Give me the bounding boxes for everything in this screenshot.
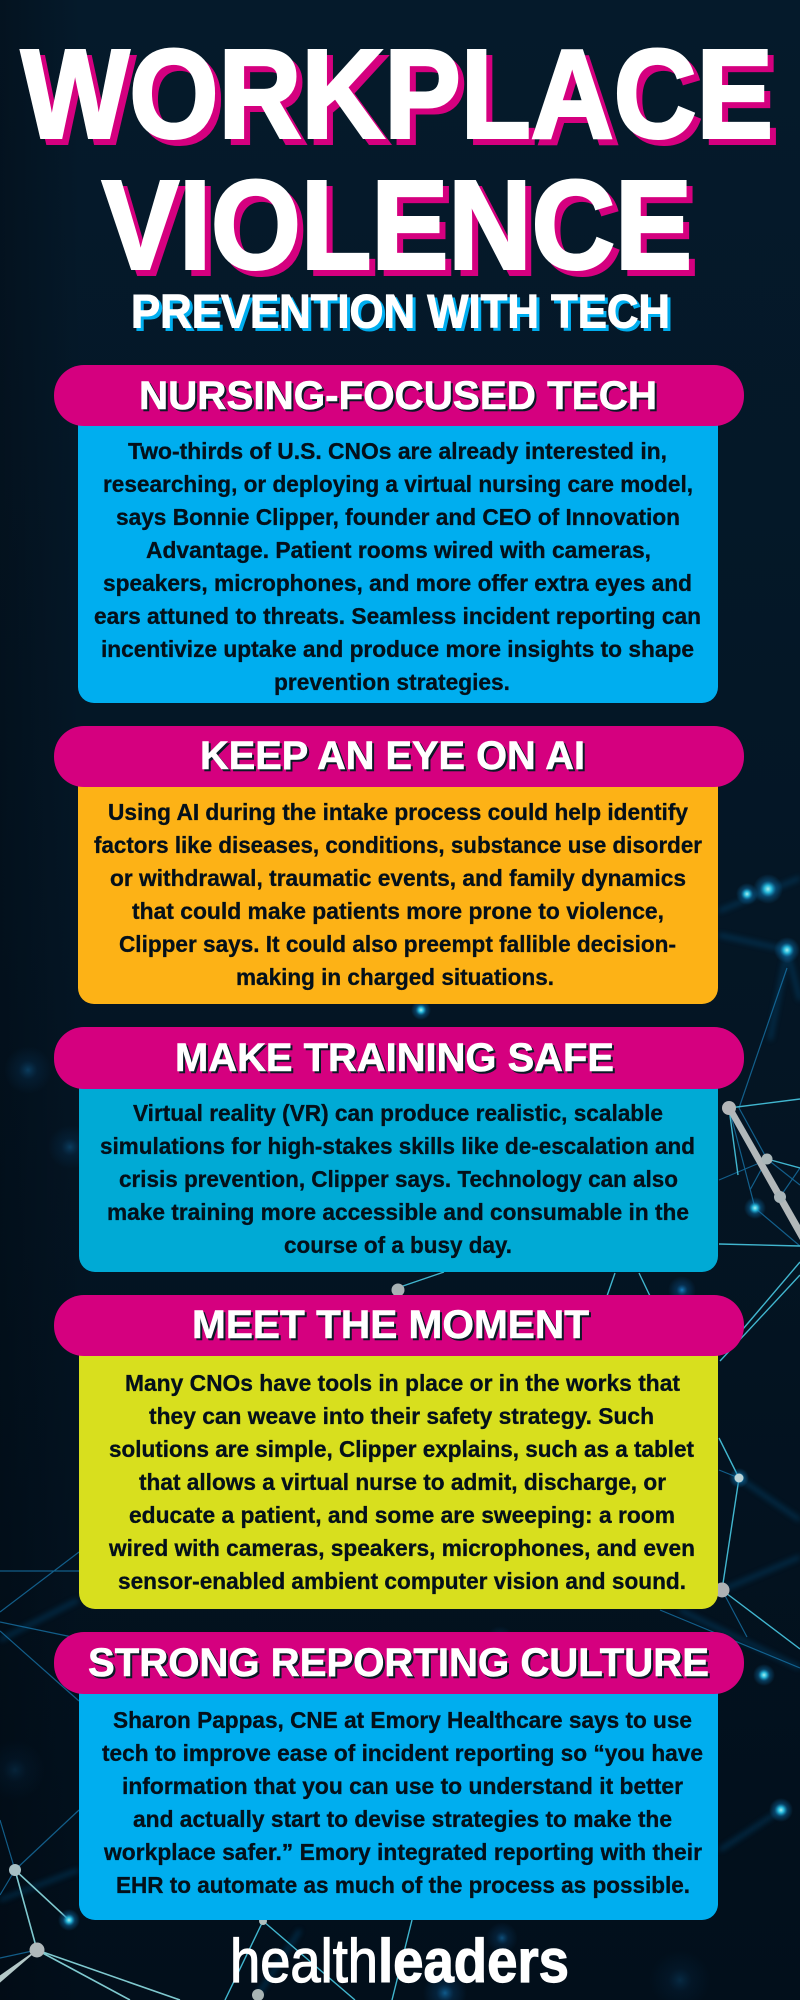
panel: strong reporting culture bbox=[54, 1632, 744, 1920]
panel: meet the moment bbox=[54, 1295, 744, 1609]
body text: meet the moment: sensor-enabled ambient computer vision and sound. bbox=[118, 1568, 686, 1594]
body text: keep an eye on AI: Using AI during the intake process could help identify bbox=[108, 799, 688, 825]
body text: strong reporting culture: and actually start to devise strategies to make the bbox=[133, 1806, 672, 1832]
logo: healthleaders bbox=[230, 1927, 569, 1995]
heading: keep an eye on AI: KEEP AN EYE ON AI bbox=[200, 734, 585, 778]
body text: nursing-focused tech: researching, or deploying a virtual nursing care model, bbox=[103, 471, 693, 497]
body text: nursing-focused tech: says Bonnie Clipper, founder and CEO of Innovation bbox=[116, 504, 680, 530]
body text: nursing-focused tech bbox=[94, 438, 701, 695]
body text: strong reporting culture: workplace safer.” Emory integrated reporting with their bbox=[103, 1839, 702, 1865]
body text: strong reporting culture: tech to improve ease of incident reporting so “you have bbox=[102, 1740, 703, 1766]
body text: nursing-focused tech: incentivize uptake and produce more insights to shape bbox=[101, 636, 694, 662]
body text: meet the moment: educate a patient, and some are sweeping: a room bbox=[129, 1502, 675, 1528]
body text: meet the moment: Many CNOs have tools in place or in the works that bbox=[125, 1370, 680, 1396]
logo: healthleaders: leaders bbox=[378, 1927, 569, 1995]
body text: keep an eye on AI: Clipper says. It could also preempt fallible decision- bbox=[119, 931, 676, 957]
body text: meet the moment: solutions are simple, Clipper explains, such as a tablet bbox=[109, 1436, 694, 1462]
body text: keep an eye on AI: that could make patients more prone to violence, bbox=[132, 898, 664, 924]
body text: meet the moment bbox=[108, 1370, 695, 1594]
body text: make training safe: make training more accessible and consumable in the bbox=[107, 1199, 689, 1225]
body text: make training safe bbox=[100, 1100, 695, 1258]
body text: make training safe: crisis prevention, Clipper says. Technology can also bbox=[119, 1166, 678, 1192]
body text: make training safe: course of a busy day. bbox=[284, 1232, 512, 1258]
body text: nursing-focused tech: speakers, microphones, and more offer extra eyes and bbox=[103, 570, 692, 596]
panel: keep an eye on AI bbox=[54, 726, 744, 1004]
body text: meet the moment: they can weave into their safety strategy. Such bbox=[149, 1403, 654, 1429]
body text: keep an eye on AI: or withdrawal, traumatic events, and family dynamics bbox=[110, 865, 686, 891]
body text: strong reporting culture: Sharon Pappas, CNE at Emory Healthcare says to use bbox=[113, 1707, 692, 1733]
heading: meet the moment: MEET THE MOMENT bbox=[192, 1303, 589, 1347]
body text: nursing-focused tech: Two-thirds of U.S. CNOs are already interested in, bbox=[128, 438, 667, 464]
body text: meet the moment: that allows a virtual nurse to admit, discharge, or bbox=[139, 1469, 666, 1495]
body text: keep an eye on AI: factors like diseases, conditions, substance use disorder bbox=[94, 832, 702, 858]
body text: keep an eye on AI bbox=[94, 799, 702, 990]
title: WORKPLACE VIOLENCE bbox=[21, 24, 773, 296]
body text: make training safe: simulations for high-stakes skills like de-escalation and bbox=[100, 1133, 695, 1159]
body text: keep an eye on AI: making in charged situations. bbox=[236, 964, 554, 990]
body text: strong reporting culture: information that you can use to understand it better bbox=[122, 1773, 683, 1799]
panel: nursing-focused tech bbox=[54, 365, 744, 703]
heading: make training safe: MAKE TRAINING SAFE bbox=[175, 1036, 614, 1080]
body text: nursing-focused tech: prevention strategies. bbox=[274, 669, 510, 695]
body text: meet the moment: wired with cameras, speakers, microphones, and even bbox=[108, 1535, 695, 1561]
logo: healthleaders: health bbox=[230, 1927, 378, 1995]
subtitle: prevention with tech: PREVENTION WITH TECH bbox=[131, 284, 670, 338]
body text: strong reporting culture bbox=[102, 1707, 703, 1898]
panel: make training safe bbox=[54, 1027, 744, 1272]
body text: make training safe: Virtual reality (VR) can produce realistic, scalable bbox=[133, 1100, 663, 1126]
body text: nursing-focused tech: Advantage. Patient rooms wired with cameras, bbox=[146, 537, 651, 563]
heading: strong reporting culture: STRONG REPORTING CULTURE bbox=[88, 1641, 709, 1685]
body text: nursing-focused tech: ears attuned to threats. Seamless incident reporting can bbox=[94, 603, 701, 629]
body text: strong reporting culture: EHR to automate as much of the process as possible. bbox=[116, 1872, 690, 1898]
title: WORKPLACE VIOLENCE: VIOLENCE bbox=[102, 154, 692, 296]
heading: nursing-focused tech: NURSING-FOCUSED TECH bbox=[139, 374, 657, 418]
